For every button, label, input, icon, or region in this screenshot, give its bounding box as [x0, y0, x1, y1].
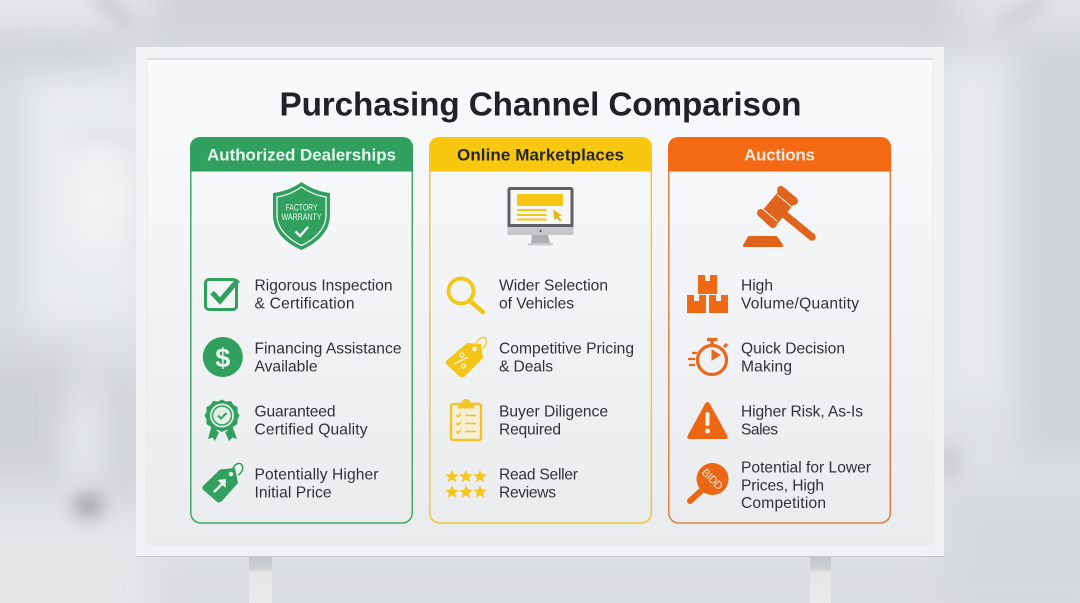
panel header [668, 137, 891, 172]
icon: factory warranty shield [273, 182, 330, 250]
item: Quick Decision Making: Making [741, 358, 792, 376]
heading: Online Marketplaces: Online Marketplaces [457, 146, 624, 164]
item: Guaranteed Certified Quality: Guaranteed [254, 404, 336, 420]
item: Rigorous Inspection: Rigorous Inspection [254, 278, 392, 294]
item: Competitive Pricing: & Deals [499, 358, 553, 376]
item: Potentially Higher Initial Price: Initial Price [254, 484, 332, 502]
item: High Volume/Quantity: High [741, 278, 773, 294]
item: Rigorous Inspection: & Certification [254, 296, 354, 312]
item: Financing Assistance: Available [254, 358, 318, 376]
item: Buyer Diligence: Buyer Diligence [499, 404, 608, 420]
item: Buyer Diligence [451, 399, 608, 440]
icon: price tag with arrow [202, 463, 243, 502]
item: High Volume/Quantity: Volume/Quantity [741, 296, 859, 312]
item: Read Seller Reviews: Reviews [499, 484, 556, 502]
heading: Auctions: Auctions [744, 146, 815, 164]
icon: clipboard checklist [451, 399, 481, 440]
panel outline [191, 138, 412, 523]
panel: Authorized Dealerships [190, 137, 413, 523]
item: Quick Decision Making: Quick Decision [741, 340, 845, 358]
panel header [429, 137, 652, 172]
item: Rigorous Inspection [206, 278, 392, 312]
icon: six stars [445, 470, 487, 498]
item: Potential for Lower Prices: Potential for Lower [741, 460, 871, 476]
item: Financing Assistance [203, 337, 402, 377]
item: Guaranteed Certified Quality [204, 400, 368, 441]
icon: rosette badge [204, 400, 240, 441]
item: Wider Selection: Wider Selection [499, 278, 608, 294]
icon: bid paddle [690, 463, 728, 501]
panel outline [669, 138, 890, 523]
icon: dollar coin: $ [215, 343, 230, 373]
icon: dollar coin [203, 337, 243, 377]
sign board [136, 47, 944, 556]
item: Guaranteed Certified Quality: Certified Quality [254, 422, 368, 438]
title: Purchasing Channel Comparison [280, 86, 802, 124]
item: Higher Risk: Sales [741, 422, 778, 438]
item: Buyer Diligence: Required [499, 422, 561, 438]
panel: Auctions [668, 137, 891, 523]
item: Financing Assistance: Financing Assistance [254, 340, 402, 358]
icon: computer monitor [508, 187, 574, 246]
icon: warning triangle [687, 402, 728, 439]
sign posts [249, 556, 831, 603]
item: Potential for Lower Prices [690, 460, 871, 512]
item: Potential for Lower Prices: Prices, High [741, 478, 824, 494]
icon: checkbox [206, 280, 238, 310]
item: Wider Selection: of Vehicles [499, 296, 574, 312]
item: High Volume/Quantity [687, 275, 859, 313]
icon: stacked boxes [687, 275, 728, 313]
icon: magnifying glass [448, 278, 483, 312]
icon: gavel [743, 190, 812, 247]
icon: stopwatch [688, 340, 727, 374]
panel header [190, 137, 413, 172]
item: Competitive Pricing: Competitive Pricing [499, 340, 634, 358]
icon: bid paddle: BIDD [699, 467, 725, 493]
icon: factory warranty shield: FACTORY [286, 202, 318, 214]
item: Quick Decision Making [688, 340, 845, 376]
item: Potential for Lower Prices: Competition [741, 495, 826, 512]
item: Potentially Higher Initial Price: Potentially Higher [254, 466, 378, 484]
panel outline [430, 138, 651, 523]
item: Potentially Higher Initial Price [202, 463, 378, 502]
item: Read Seller Reviews [445, 466, 578, 502]
item: Higher Risk [687, 402, 863, 439]
panel: Online Marketplaces [429, 137, 652, 523]
item: Competitive Pricing [446, 337, 634, 378]
item: Higher Risk: Higher Risk, As-Is [741, 404, 863, 420]
item: Wider Selection [448, 278, 608, 312]
icon: factory warranty shield: WARRANTY [282, 212, 322, 223]
item: Read Seller Reviews: Read Seller [499, 466, 578, 484]
icon: discount tag [446, 337, 486, 378]
heading: Authorized Dealerships: Authorized Dealerships [207, 146, 396, 164]
